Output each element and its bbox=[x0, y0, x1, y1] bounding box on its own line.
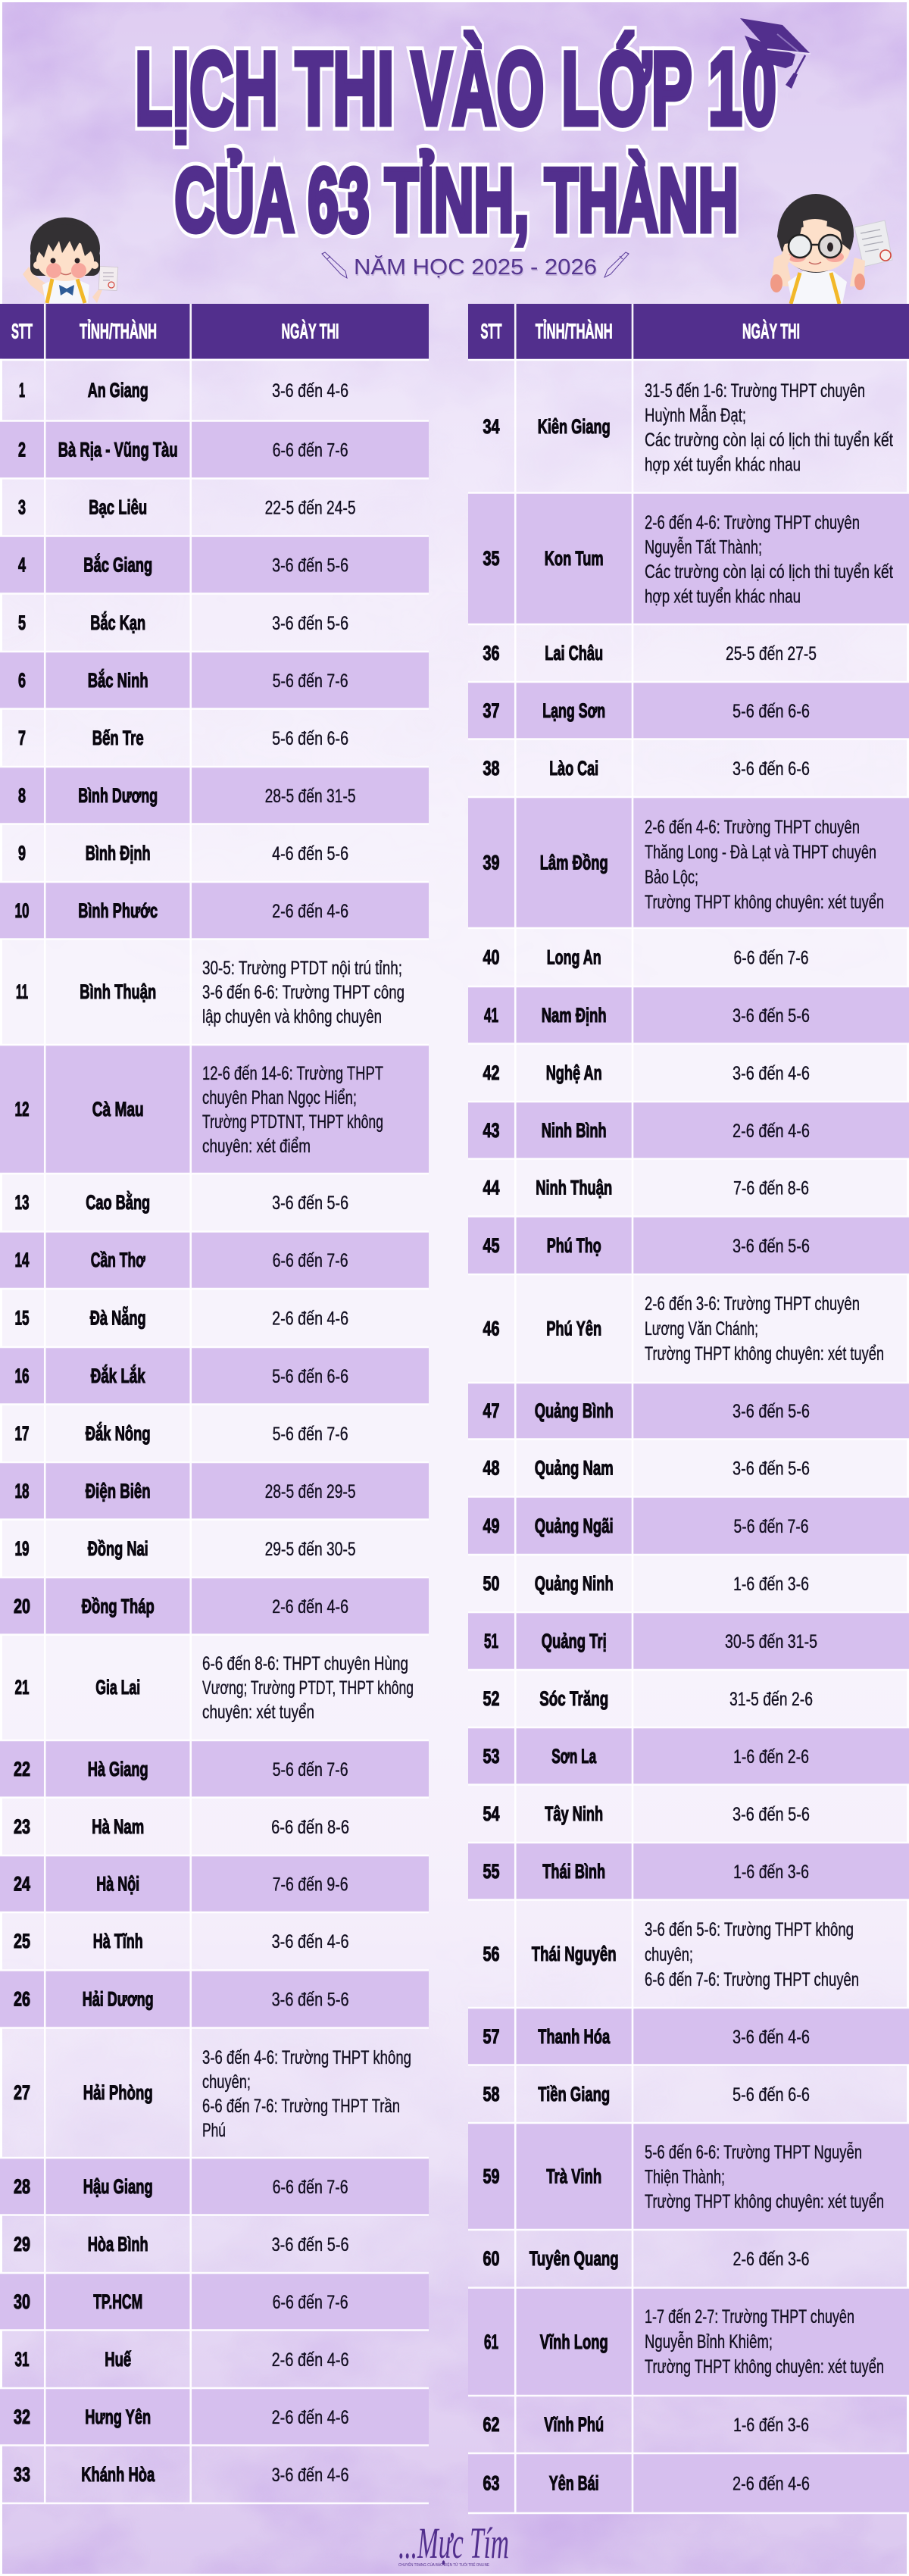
row 61: Vĩnh Long bbox=[468, 2288, 909, 2396]
row 51: Quảng Trị: 30-5 đến 31-5 bbox=[725, 1631, 817, 1652]
row 35: Kon Tum: Kon Tum bbox=[545, 547, 604, 570]
logo: Mực Tím: CHUYÊN TRANG CỦA BÁO ĐIỆN TỬ TUỔI TRẺ ONLINE bbox=[398, 2562, 490, 2568]
row 53: Sơn La bbox=[468, 1727, 909, 1785]
row 23: Hà Nam: Hà Nam bbox=[92, 1815, 144, 1838]
row 17: Đắk Nông: 17 bbox=[15, 1422, 29, 1445]
row 40: Long An: Long An bbox=[547, 946, 601, 968]
row 14: Cần Thơ bbox=[0, 1232, 429, 1289]
logo: Mực Tím: ...Mực Tím bbox=[398, 2518, 509, 2568]
row 29: Hòa Bình bbox=[14, 2233, 349, 2256]
row 30: TP.HCM: TP.HCM bbox=[93, 2290, 142, 2313]
row 21: Gia Lai: 21 bbox=[15, 1676, 29, 1699]
left table header: NGÀY THI bbox=[282, 320, 339, 342]
row 33: Khánh Hòa: 3-6 đến 4-6 bbox=[272, 2465, 349, 2486]
row 29: Hòa Bình: 3-6 đến 5-6 bbox=[272, 2234, 349, 2256]
row 4: Bắc Giang: Bắc Giang bbox=[83, 553, 152, 576]
row 50: Quảng Ninh: 50 bbox=[483, 1572, 500, 1595]
row 12: Cà Mau: Trường PTDTNT, THPT không bbox=[202, 1111, 383, 1133]
logo: Mực Tím bbox=[398, 2518, 509, 2568]
row 42: Nghệ An: 42 bbox=[483, 1061, 500, 1084]
row 63: Yên Bái bbox=[468, 2453, 909, 2513]
row 52: Sóc Trăng: 31-5 đến 2-6 bbox=[729, 1689, 813, 1710]
row 28: Hậu Giang: 28 bbox=[14, 2175, 30, 2198]
row 59: Trà Vinh: Thiện Thành; bbox=[645, 2167, 725, 2188]
row 12: Cà Mau: 12 bbox=[15, 1098, 29, 1121]
row 10: Bình Phước bbox=[0, 882, 429, 939]
row 15: Đà Nẵng bbox=[15, 1305, 348, 1329]
row 1: An Giang: 3-6 đến 4-6 bbox=[272, 380, 348, 402]
row 38: Lào Cai bbox=[483, 757, 810, 780]
row 49: Quảng Ngãi: 5-6 đến 7-6 bbox=[733, 1516, 809, 1537]
row 63: Yên Bái: 2-6 đến 4-6 bbox=[733, 2473, 810, 2494]
row 31: Huế: 31 bbox=[15, 2348, 29, 2371]
row 39: Lâm Đồng: Bảo Lộc; bbox=[645, 867, 698, 888]
row 2: Bà Rịa - Vũng Tàu: 2 bbox=[18, 438, 26, 461]
row 2: Bà Rịa - Vũng Tàu: 6-6 đến 7-6 bbox=[273, 439, 348, 461]
row 55: Thái Bình: 55 bbox=[483, 1860, 500, 1883]
row 48: Quảng Nam: Quảng Nam bbox=[535, 1456, 614, 1479]
row 25: Hà Tĩnh: Hà Tĩnh bbox=[93, 1930, 143, 1952]
row 10: Bình Phước: Bình Phước bbox=[78, 899, 158, 922]
row 51: Quảng Trị bbox=[468, 1612, 909, 1670]
row 31: Huế: 2-6 đến 4-6 bbox=[272, 2349, 349, 2371]
row 26: Hải Dương bbox=[0, 1970, 429, 2027]
row 62: Vĩnh Phú: 62 bbox=[483, 2413, 500, 2436]
row 52: Sóc Trăng bbox=[483, 1687, 813, 1710]
panel: left table bbox=[0, 304, 429, 2504]
row 43: Ninh Bình: 43 bbox=[483, 1119, 500, 1142]
row 51: Quảng Trị: Quảng Trị bbox=[542, 1630, 607, 1652]
row 19: Đồng Nai: 29-5 đến 30-5 bbox=[265, 1539, 356, 1560]
row 18: Điện Biên: 18 bbox=[15, 1480, 29, 1502]
row 19: Đồng Nai bbox=[15, 1537, 356, 1560]
row 14: Cần Thơ: 6-6 đến 7-6 bbox=[273, 1250, 348, 1271]
row 44: Ninh Thuận: 44 bbox=[483, 1176, 500, 1199]
row 21: Gia Lai bbox=[15, 1653, 414, 1723]
row 5: Bắc Kạn: 3-6 đến 5-6 bbox=[272, 613, 348, 634]
row 6: Bắc Ninh: 6 bbox=[18, 669, 26, 692]
row 38: Lào Cai: 3-6 đến 6-6 bbox=[733, 758, 810, 780]
row 37: Lạng Sơn: 5-6 đến 6-6 bbox=[733, 701, 810, 722]
row 60: Tuyên Quang: Tuyên Quang bbox=[529, 2247, 619, 2270]
row 36: Lai Châu: 36 bbox=[483, 642, 500, 664]
row 59: Trà Vinh: 59 bbox=[483, 2165, 500, 2188]
row 44: Ninh Thuận bbox=[483, 1176, 809, 1199]
row 61: Vĩnh Long: Nguyễn Bỉnh Khiêm; bbox=[645, 2331, 773, 2352]
row 47: Quảng Bình: 3-6 đến 5-6 bbox=[733, 1401, 810, 1422]
row 55: Thái Bình bbox=[468, 1843, 909, 1900]
row 7: Bến Tre bbox=[18, 727, 348, 749]
row 21: Gia Lai: Gia Lai bbox=[95, 1676, 140, 1699]
row 17: Đắk Nông: 5-6 đến 7-6 bbox=[273, 1424, 348, 1445]
row 13: Cao Bằng: 13 bbox=[15, 1191, 29, 1214]
row 37: Lạng Sơn: Lạng Sơn bbox=[542, 699, 605, 722]
row 42: Nghệ An: 3-6 đến 4-6 bbox=[733, 1063, 810, 1084]
row 47: Quảng Bình: 47 bbox=[483, 1399, 500, 1422]
row 12: Cà Mau: chuyên Phan Ngọc Hiển; bbox=[202, 1087, 357, 1108]
row 44: Ninh Thuận: 7-6 đến 8-6 bbox=[733, 1177, 809, 1199]
row 4: Bắc Giang: 4 bbox=[18, 553, 26, 576]
row 8: Bình Dương: 8 bbox=[18, 784, 26, 807]
row 61: Vĩnh Long: Vĩnh Long bbox=[540, 2331, 608, 2353]
row 52: Sóc Trăng: 52 bbox=[483, 1687, 500, 1710]
row 5: Bắc Kạn bbox=[18, 611, 348, 634]
row 12: Cà Mau: chuyên: xét điểm bbox=[202, 1136, 311, 1157]
left table header: STT bbox=[11, 320, 33, 342]
row 30: TP.HCM bbox=[0, 2273, 429, 2331]
row 12: Cà Mau: Cà Mau bbox=[92, 1098, 144, 1121]
row 11: Bình Thuận bbox=[16, 958, 405, 1027]
row 27: Hải Phòng: 6-6 đến 7-6: Trường THPT Trần bbox=[202, 2096, 400, 2117]
row 54: Tây Ninh: 54 bbox=[483, 1802, 500, 1825]
left table header: TỈNH/THÀNH bbox=[80, 318, 157, 342]
row 41: Nam Định: Nam Định bbox=[542, 1004, 607, 1027]
row 58: Tiền Giang: Tiền Giang bbox=[538, 2083, 610, 2106]
row 18: Điện Biên: Điện Biên bbox=[86, 1480, 151, 1502]
right table header: TỈNH/THÀNH bbox=[536, 318, 613, 342]
row 18: Điện Biên: 28-5 đến 29-5 bbox=[265, 1481, 356, 1502]
row 58: Tiền Giang: 58 bbox=[483, 2083, 500, 2106]
row 60: Tuyên Quang bbox=[483, 2247, 809, 2270]
row 30: TP.HCM: 30 bbox=[14, 2290, 30, 2313]
row 29: Hòa Bình: Hòa Bình bbox=[88, 2233, 148, 2256]
row 54: Tây Ninh: 3-6 đến 5-6 bbox=[733, 1804, 810, 1825]
row 26: Hải Dương: Hải Dương bbox=[83, 1988, 154, 2011]
row 44: Ninh Thuận: Ninh Thuận bbox=[536, 1176, 612, 1199]
row 27: Hải Phòng: 3-6 đến 4-6: Trường THPT không bbox=[202, 2047, 411, 2068]
row 35: Kon Tum: hợp xét tuyển khác nhau bbox=[645, 586, 801, 608]
row 40: Long An: 6-6 đến 7-6 bbox=[733, 947, 809, 968]
row 11: Bình Thuận: lập chuyên và không chuyên bbox=[202, 1006, 382, 1027]
row 7: Bến Tre: 5-6 đến 6-6 bbox=[272, 728, 348, 749]
row 20: Đồng Tháp: Đồng Tháp bbox=[82, 1595, 155, 1618]
row 55: Thái Bình: 1-6 đến 3-6 bbox=[733, 1862, 809, 1883]
panel: right table bbox=[468, 304, 909, 2514]
row 56: Thái Nguyên: Thái Nguyên bbox=[532, 1943, 617, 1965]
row 31: Huế bbox=[15, 2348, 349, 2371]
row 23: Hà Nam: 6-6 đến 8-6 bbox=[271, 1817, 349, 1838]
row 48: Quảng Nam bbox=[483, 1456, 810, 1479]
row 52: Sóc Trăng: Sóc Trăng bbox=[539, 1687, 608, 1710]
row 21: Gia Lai: Vương; Trường PTDT, THPT không bbox=[202, 1677, 414, 1699]
row 33: Khánh Hòa bbox=[14, 2463, 349, 2486]
row 60: Tuyên Quang: 60 bbox=[483, 2247, 500, 2270]
row 16: Đắk Lắk: 5-6 đến 6-6 bbox=[272, 1366, 348, 1387]
row 63: Yên Bái: Yên Bái bbox=[549, 2471, 599, 2494]
row 51: Quảng Trị: 51 bbox=[484, 1630, 498, 1652]
row 47: Quảng Bình: Quảng Bình bbox=[535, 1399, 614, 1422]
row 24: Hà Nội: 7-6 đến 9-6 bbox=[273, 1874, 348, 1896]
subtitle: school year: NĂM HỌC 2025 - 2026 bbox=[355, 256, 598, 281]
row 6: Bắc Ninh: Bắc Ninh bbox=[88, 668, 148, 692]
row 32: Hưng Yên: 32 bbox=[14, 2406, 30, 2428]
row 18: Điện Biên bbox=[0, 1462, 429, 1520]
row 49: Quảng Ngãi bbox=[468, 1497, 909, 1555]
row 24: Hà Nội bbox=[0, 1855, 429, 1912]
row 43: Ninh Bình: 2-6 đến 4-6 bbox=[733, 1121, 810, 1142]
row 39: Lâm Đồng: 39 bbox=[483, 852, 500, 874]
row 59: Trà Vinh: Trà Vinh bbox=[546, 2165, 601, 2188]
right table header: NGÀY THI bbox=[742, 320, 800, 342]
row 28: Hậu Giang bbox=[0, 2158, 429, 2215]
row 43: Ninh Bình bbox=[468, 1102, 909, 1159]
row 41: Nam Định: 3-6 đến 5-6 bbox=[733, 1005, 810, 1027]
row 40: Long An: 40 bbox=[483, 946, 500, 968]
row 23: Hà Nam: 23 bbox=[14, 1815, 30, 1838]
row 12: Cà Mau: 12-6 đến 14-6: Trường THPT bbox=[202, 1063, 383, 1084]
row 25: Hà Tĩnh: 25 bbox=[14, 1930, 30, 1952]
row 59: Trà Vinh bbox=[468, 2123, 909, 2230]
row 23: Hà Nam bbox=[14, 1815, 349, 1838]
row 49: Quảng Ngãi: Quảng Ngãi bbox=[535, 1515, 614, 1537]
row 27: Hải Phòng: 27 bbox=[14, 2081, 30, 2104]
row 60: Tuyên Quang: 2-6 đến 3-6 bbox=[733, 2249, 809, 2270]
row 10: Bình Phước: 2-6 đến 4-6 bbox=[272, 901, 348, 922]
row 28: Hậu Giang: 6-6 đến 7-6 bbox=[273, 2177, 348, 2198]
row 31: Huế: Huế bbox=[105, 2348, 132, 2371]
row 48: Quảng Nam: 48 bbox=[483, 1456, 500, 1479]
row 30: TP.HCM: 6-6 đến 7-6 bbox=[273, 2292, 348, 2313]
row 39: Lâm Đồng bbox=[468, 797, 909, 928]
right table header bbox=[468, 304, 909, 359]
row 8: Bình Dương: Bình Dương bbox=[78, 784, 158, 807]
row 13: Cao Bằng: 3-6 đến 5-6 bbox=[272, 1193, 348, 1214]
row 11: Bình Thuận: 3-6 đến 6-6: Trường THPT công bbox=[202, 982, 405, 1003]
row 21: Gia Lai: 6-6 đến 8-6: THPT chuyên Hùng bbox=[202, 1653, 408, 1674]
row 36: Lai Châu: 25-5 đến 27-5 bbox=[726, 643, 817, 664]
row 4: Bắc Giang: 3-6 đến 5-6 bbox=[272, 555, 348, 576]
row 7: Bến Tre: 7 bbox=[18, 727, 26, 749]
row 1: An Giang: An Giang bbox=[88, 379, 148, 402]
row 27: Hải Phòng: chuyên; bbox=[202, 2071, 251, 2093]
row 24: Hà Nội: Hà Nội bbox=[96, 1873, 139, 1896]
row 37: Lạng Sơn: 37 bbox=[483, 699, 500, 722]
row 2: Bà Rịa - Vũng Tàu: Bà Rịa - Vũng Tàu bbox=[58, 438, 178, 461]
row 9: Bình Định: 9 bbox=[18, 842, 26, 864]
row 62: Vĩnh Phú: Vĩnh Phú bbox=[544, 2413, 604, 2436]
row 34: Kiên Giang bbox=[483, 380, 893, 476]
row 25: Hà Tĩnh bbox=[14, 1930, 349, 1952]
row 40: Long An bbox=[483, 946, 809, 968]
row 46: Phú Yên: 46 bbox=[483, 1317, 500, 1340]
row 43: Ninh Bình: Ninh Bình bbox=[542, 1119, 607, 1142]
row 41: Nam Định: 41 bbox=[484, 1004, 498, 1027]
row 58: Tiền Giang bbox=[483, 2083, 810, 2106]
row 22: Hà Giang: 22 bbox=[14, 1758, 30, 1780]
row 7: Bến Tre: Bến Tre bbox=[92, 727, 144, 749]
row 38: Lào Cai: 38 bbox=[483, 757, 500, 780]
row 34: Kiên Giang: 34 bbox=[483, 415, 500, 438]
row 3: Bạc Liêu: Bạc Liêu bbox=[89, 496, 147, 518]
row 50: Quảng Ninh bbox=[483, 1572, 809, 1595]
row 54: Tây Ninh: Tây Ninh bbox=[545, 1802, 603, 1825]
row 53: Sơn La: Sơn La bbox=[551, 1745, 597, 1768]
row 61: Vĩnh Long: 61 bbox=[484, 2331, 498, 2353]
row 53: Sơn La: 1-6 đến 2-6 bbox=[733, 1746, 809, 1768]
row 56: Thái Nguyên bbox=[483, 1919, 859, 1990]
row 22: Hà Giang bbox=[0, 1740, 429, 1797]
row 63: Yên Bái: 63 bbox=[483, 2471, 500, 2494]
row 5: Bắc Kạn: Bắc Kạn bbox=[90, 611, 145, 634]
row 56: Thái Nguyên: chuyên; bbox=[645, 1944, 693, 1965]
row 35: Kon Tum: Nguyễn Tất Thành; bbox=[645, 536, 762, 558]
row 28: Hậu Giang: Hậu Giang bbox=[83, 2175, 153, 2198]
row 29: Hòa Bình: 29 bbox=[14, 2233, 30, 2256]
row 33: Khánh Hòa: 33 bbox=[14, 2463, 30, 2486]
row 15: Đà Nẵng: 2-6 đến 4-6 bbox=[272, 1308, 348, 1329]
row 9: Bình Định bbox=[18, 842, 348, 864]
row 42: Nghệ An bbox=[483, 1061, 810, 1084]
row 20: Đồng Tháp bbox=[0, 1577, 429, 1635]
title bbox=[135, 31, 776, 251]
row 46: Phú Yên: Lương Văn Chánh; bbox=[645, 1318, 758, 1340]
illustration: boy student with glasses bbox=[770, 194, 892, 304]
row 50: Quảng Ninh: 1-6 đến 3-6 bbox=[733, 1574, 809, 1595]
row 11: Bình Thuận: 30-5: Trường PTDT nội trú tỉnh; bbox=[202, 958, 402, 979]
row 27: Hải Phòng bbox=[14, 2047, 411, 2141]
row 17: Đắk Nông bbox=[15, 1421, 348, 1445]
row 32: Hưng Yên bbox=[0, 2388, 429, 2446]
row 45: Phú Thọ bbox=[468, 1217, 909, 1274]
row 37: Lạng Sơn bbox=[468, 682, 909, 739]
illustration: girl student bbox=[23, 217, 118, 303]
row 57: Thanh Hóa: 57 bbox=[483, 2025, 500, 2048]
row 20: Đồng Tháp: 20 bbox=[14, 1595, 30, 1618]
row 57: Thanh Hóa: Thanh Hóa bbox=[538, 2025, 611, 2048]
row 58: Tiền Giang: 5-6 đến 6-6 bbox=[733, 2084, 810, 2106]
row 22: Hà Giang: 5-6 đến 7-6 bbox=[273, 1759, 348, 1780]
row 9: Bình Định: Bình Định bbox=[86, 842, 151, 864]
row 45: Phú Thọ: 3-6 đến 5-6 bbox=[733, 1236, 810, 1257]
row 15: Đà Nẵng: Đà Nẵng bbox=[90, 1305, 146, 1329]
row 24: Hà Nội: 24 bbox=[14, 1873, 30, 1896]
row 46: Phú Yên bbox=[483, 1293, 884, 1365]
row 32: Hưng Yên: Hưng Yên bbox=[85, 2406, 151, 2428]
row 16: Đắk Lắk bbox=[0, 1347, 429, 1405]
row 3: Bạc Liêu: 22-5 đến 24-5 bbox=[265, 497, 356, 518]
subtitle: school year: NĂM HỌC 2025 - 2026 bbox=[354, 255, 597, 280]
icon: right pen bbox=[604, 252, 629, 277]
row 3: Bạc Liêu bbox=[18, 496, 356, 518]
row 16: Đắk Lắk: Đắk Lắk bbox=[91, 1364, 145, 1387]
row 21: Gia Lai: chuyên: xét tuyển bbox=[202, 1702, 314, 1723]
row 6: Bắc Ninh bbox=[0, 652, 429, 709]
row 45: Phú Thọ: 45 bbox=[483, 1234, 500, 1257]
row 33: Khánh Hòa: Khánh Hòa bbox=[81, 2463, 155, 2486]
row 35: Kon Tum: 35 bbox=[483, 547, 500, 570]
row 8: Bình Dương: 28-5 đến 31-5 bbox=[265, 786, 356, 807]
row 1: An Giang: 1 bbox=[19, 379, 25, 402]
row 41: Nam Định bbox=[468, 986, 909, 1044]
row 15: Đà Nẵng: 15 bbox=[15, 1306, 29, 1329]
row 54: Tây Ninh bbox=[483, 1802, 810, 1825]
row 32: Hưng Yên: 2-6 đến 4-6 bbox=[272, 2407, 349, 2428]
row 4: Bắc Giang bbox=[0, 536, 429, 594]
row 49: Quảng Ngãi: 49 bbox=[483, 1515, 500, 1537]
row 14: Cần Thơ: Cần Thơ bbox=[91, 1249, 145, 1271]
row 20: Đồng Tháp: 2-6 đến 4-6 bbox=[272, 1596, 348, 1618]
row 16: Đắk Lắk: 16 bbox=[15, 1365, 29, 1387]
row 1: An Giang bbox=[19, 379, 348, 402]
row 8: Bình Dương bbox=[0, 767, 429, 824]
row 6: Bắc Ninh: 5-6 đến 7-6 bbox=[273, 671, 348, 692]
row 12: Cà Mau bbox=[0, 1045, 429, 1174]
row 25: Hà Tĩnh: 3-6 đến 4-6 bbox=[272, 1931, 349, 1952]
icon: graduation cap bbox=[740, 18, 811, 89]
row 34: Kiên Giang: Huỳnh Mẫn Đạt; bbox=[645, 405, 746, 426]
row 14: Cần Thơ: 14 bbox=[15, 1249, 29, 1271]
row 38: Lào Cai: Lào Cai bbox=[549, 757, 598, 780]
row 19: Đồng Nai: 19 bbox=[15, 1537, 29, 1560]
row 57: Thanh Hóa bbox=[468, 2008, 909, 2065]
left table header bbox=[0, 304, 429, 359]
row 13: Cao Bằng bbox=[15, 1190, 348, 1214]
row 26: Hải Dương: 26 bbox=[14, 1988, 30, 2011]
row 2: Bà Rịa - Vũng Tàu bbox=[0, 421, 429, 479]
row 13: Cao Bằng: Cao Bằng bbox=[86, 1190, 150, 1214]
row 11: Bình Thuận: 11 bbox=[16, 980, 28, 1003]
row 42: Nghệ An: Nghệ An bbox=[546, 1061, 602, 1084]
row 62: Vĩnh Phú: 1-6 đến 3-6 bbox=[733, 2415, 809, 2436]
row 39: Lâm Đồng: Lâm Đồng bbox=[540, 852, 608, 874]
row 53: Sơn La: 53 bbox=[483, 1745, 500, 1768]
row 17: Đắk Nông: Đắk Nông bbox=[86, 1421, 151, 1445]
row 3: Bạc Liêu: 3 bbox=[18, 496, 26, 518]
row 11: Bình Thuận: Bình Thuận bbox=[80, 980, 156, 1003]
row 46: Phú Yên: Phú Yên bbox=[546, 1317, 601, 1340]
row 47: Quảng Bình bbox=[468, 1383, 909, 1440]
row 27: Hải Phòng: Phú bbox=[202, 2120, 226, 2141]
row 10: Bình Phước: 10 bbox=[15, 899, 29, 922]
row 62: Vĩnh Phú bbox=[483, 2413, 809, 2436]
icon: left pen bbox=[322, 252, 347, 278]
row 48: Quảng Nam: 3-6 đến 5-6 bbox=[733, 1458, 810, 1479]
row 19: Đồng Nai: Đồng Nai bbox=[88, 1537, 148, 1560]
row 35: Kon Tum bbox=[468, 492, 909, 624]
row 34: Kiên Giang: Kiên Giang bbox=[538, 415, 611, 438]
row 55: Thái Bình: Thái Bình bbox=[542, 1860, 605, 1883]
row 57: Thanh Hóa: 3-6 đến 4-6 bbox=[733, 2027, 810, 2048]
row 56: Thái Nguyên: 56 bbox=[483, 1943, 500, 1965]
row 9: Bình Định: 4-6 đến 5-6 bbox=[272, 843, 348, 864]
right table header: STT bbox=[480, 320, 501, 342]
row 22: Hà Giang: Hà Giang bbox=[88, 1758, 148, 1780]
row 26: Hải Dương: 3-6 đến 5-6 bbox=[272, 1990, 349, 2011]
row 5: Bắc Kạn: 5 bbox=[18, 611, 26, 634]
row 36: Lai Châu bbox=[483, 642, 817, 664]
row 34: Kiên Giang: hợp xét tuyển khác nhau bbox=[645, 455, 801, 476]
row 36: Lai Châu: Lai Châu bbox=[545, 642, 603, 664]
row 50: Quảng Ninh: Quảng Ninh bbox=[535, 1572, 614, 1595]
row 27: Hải Phòng: Hải Phòng bbox=[83, 2081, 153, 2104]
row 45: Phú Thọ: Phú Thọ bbox=[547, 1234, 601, 1257]
